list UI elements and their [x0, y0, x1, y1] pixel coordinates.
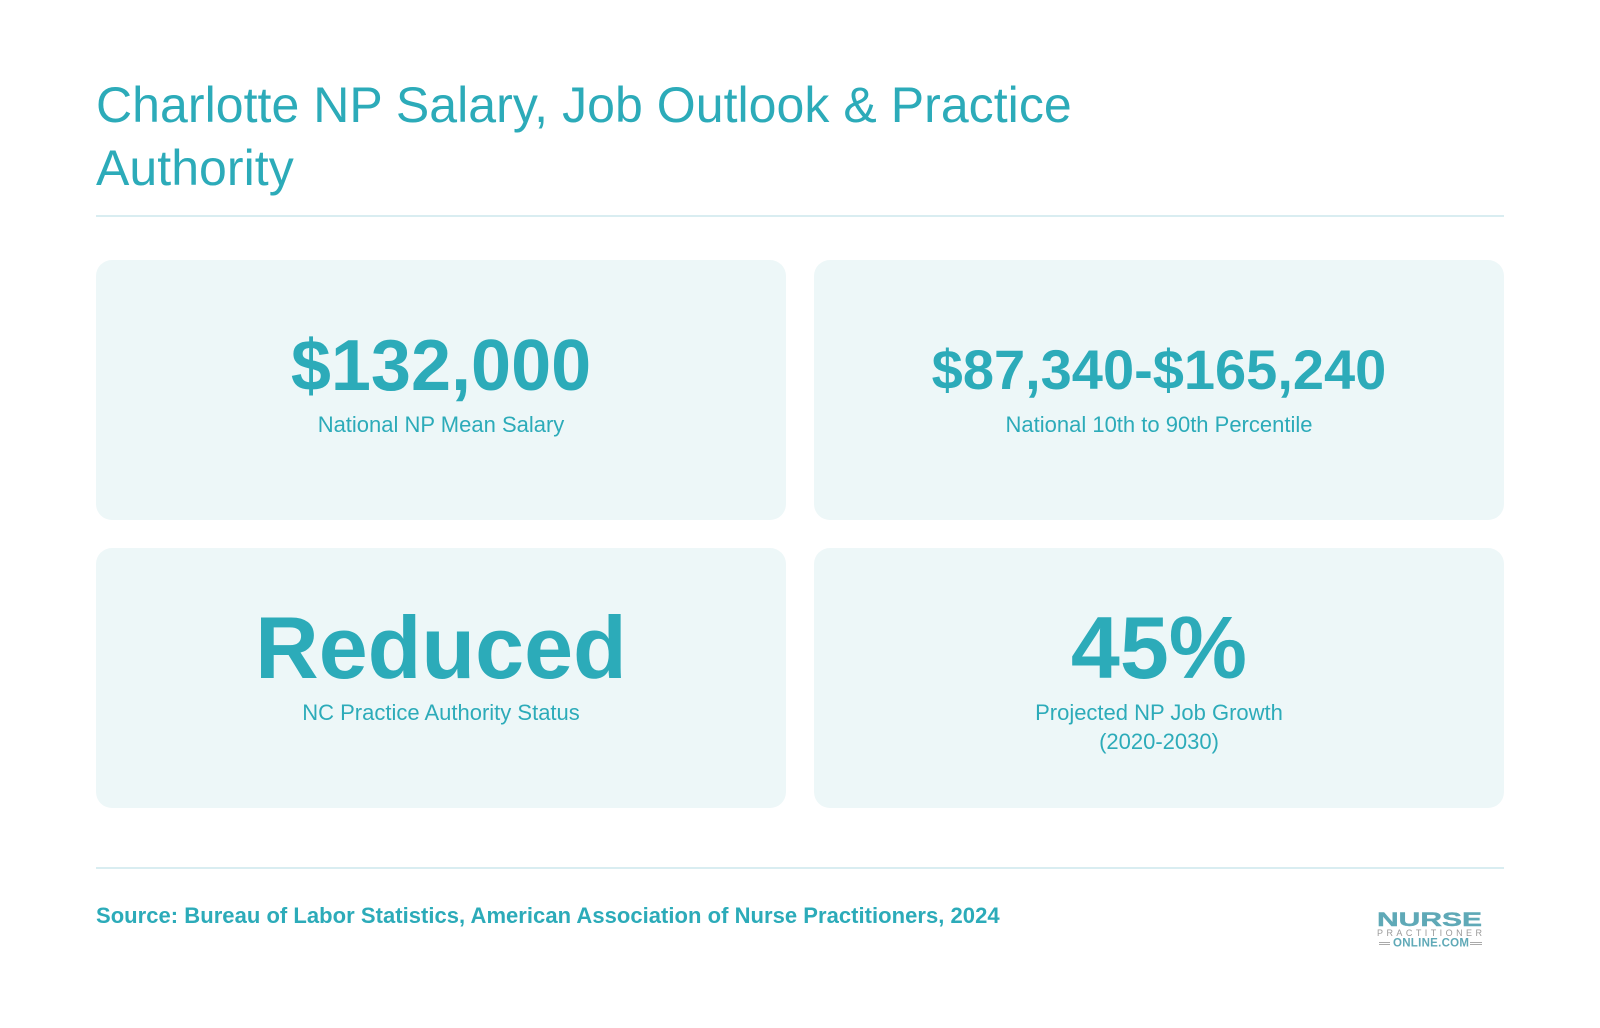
panel: percentile range [814, 260, 1504, 520]
value: mean salary: $132,000 [291, 326, 591, 406]
label: practice authority: NC Practice Authority Status [302, 700, 580, 725]
panel: job growth [814, 548, 1504, 808]
panel: practice authority [96, 548, 786, 808]
value: percentile range: $87,340-$165,240 [932, 338, 1386, 401]
logo: online.com: ONLINE.COM [1393, 938, 1469, 950]
value: practice authority: Reduced [255, 598, 627, 697]
logo: nurse: NURSE [1377, 909, 1482, 931]
label: job growth: (2020-2030) [1099, 729, 1219, 754]
label: job growth: Projected NP Job Growth [1035, 700, 1283, 725]
value: job growth: 45% [1071, 598, 1247, 697]
label: mean salary: National NP Mean Salary [318, 412, 564, 437]
label: percentile range: National 10th to 90th Percentile [1006, 412, 1312, 437]
source note: Source: Bureau of Labor Statistics, American Association of Nurse Practitioners, 2024 [96, 903, 1000, 928]
title: Charlotte NP Salary, Job Outlook & Practice Authority [96, 77, 1072, 196]
logo [1377, 909, 1482, 950]
label: job growth [1035, 700, 1283, 754]
logo: practitioner: PRACTITIONER [1377, 928, 1482, 938]
panel: national mean salary [96, 260, 786, 520]
